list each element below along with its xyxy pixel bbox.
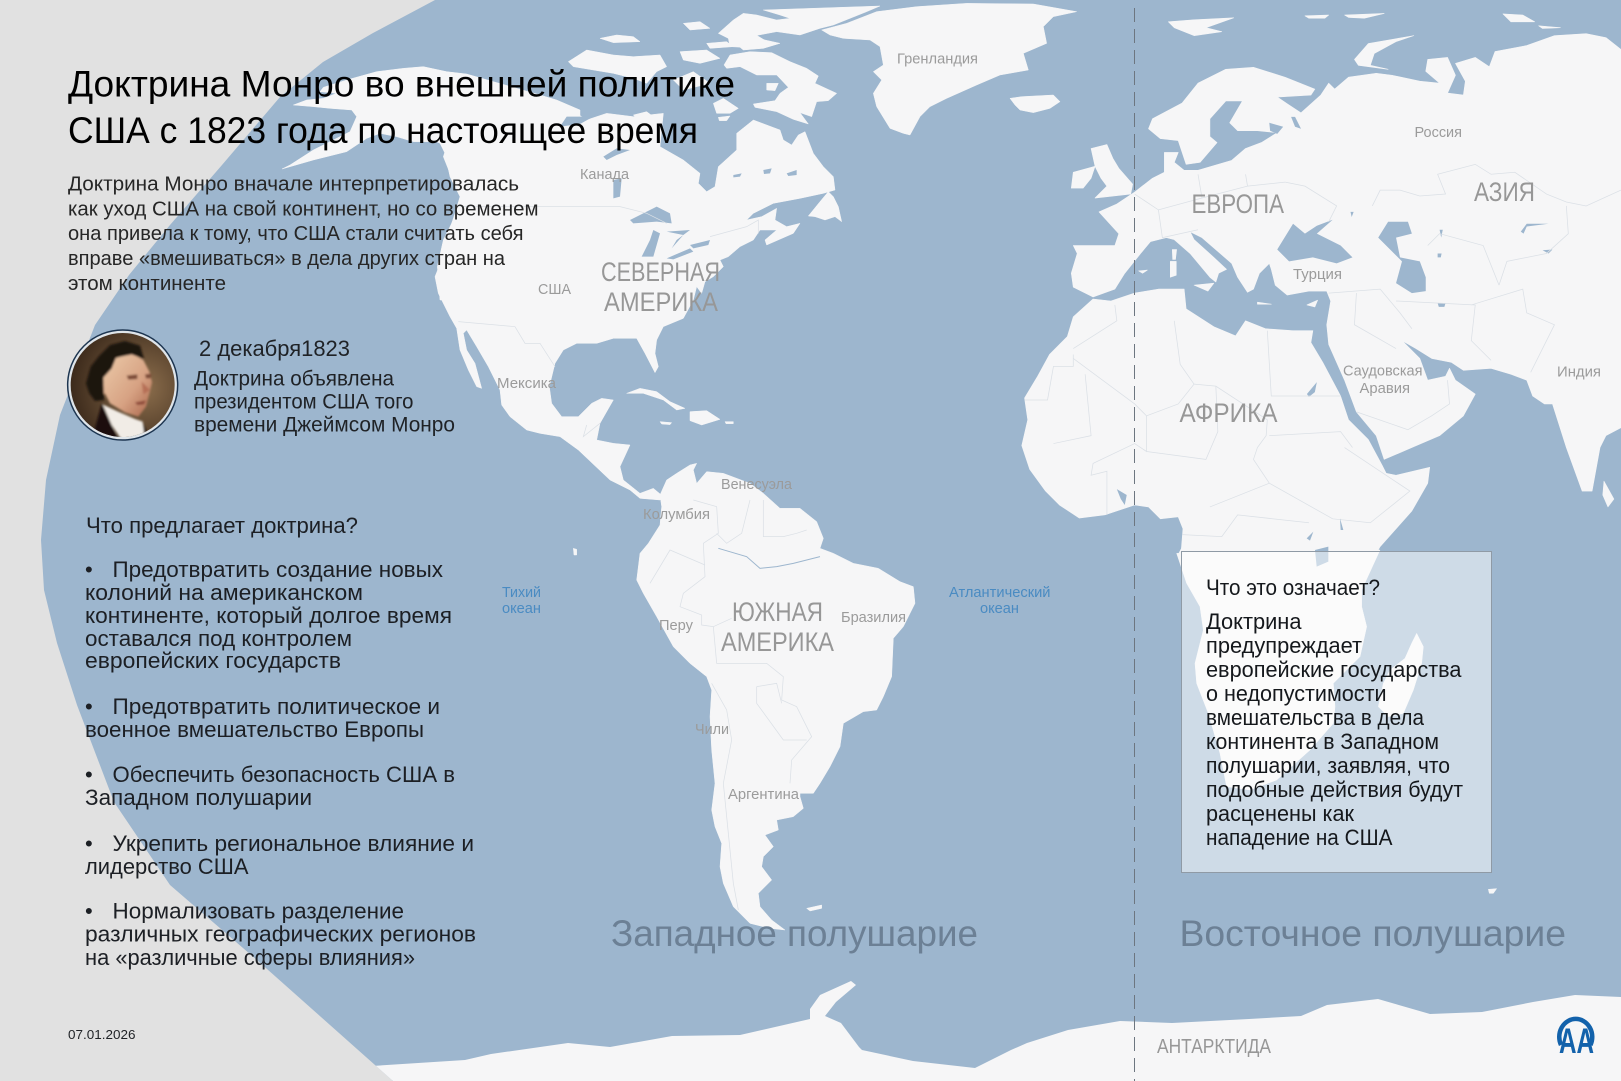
continent labels: АЗИЯ bbox=[1474, 177, 1535, 207]
country labels: Бразилия bbox=[841, 609, 906, 626]
heading: Что предлагает доктрина? bbox=[86, 513, 358, 538]
hemisphere labels bbox=[611, 913, 1566, 954]
bullet list: • bbox=[85, 694, 93, 719]
bullet list: на «различные сферы влияния» bbox=[85, 945, 415, 970]
Eurasian and African borders bbox=[1025, 164, 1621, 537]
bullet list: Нормализовать разделение bbox=[112, 898, 404, 924]
continent labels: АМЕРИКА bbox=[721, 627, 834, 657]
country labels: Канада bbox=[580, 166, 630, 183]
intro paragraph: вправе «вмешиваться» в дела других стран на bbox=[68, 247, 506, 270]
title: США с 1823 года по настоящее время bbox=[68, 110, 698, 151]
panel body text: предупреждает bbox=[1206, 633, 1362, 658]
date stamp: 07.01.2026 bbox=[68, 1027, 136, 1042]
bullet list: Укрепить региональное влияние и bbox=[112, 831, 474, 856]
bullet list: континенте, который долгое время bbox=[85, 603, 452, 628]
intro paragraph: как уход США на свой континент, но со временем bbox=[68, 198, 538, 220]
Caspian Sea bbox=[1378, 222, 1426, 293]
hemisphere divider line bbox=[1134, 8, 1136, 1081]
Greenland bbox=[822, 3, 1077, 135]
Arctic islands and Greenland bbox=[713, 3, 1077, 222]
panel heading: Что это означает? bbox=[1206, 575, 1380, 600]
bullet list: европейских государств bbox=[85, 648, 341, 673]
ocean labels: Атлантический bbox=[949, 585, 1050, 601]
South American borders bbox=[650, 500, 812, 910]
African lakes bbox=[1307, 518, 1343, 567]
intro paragraph: она привела к тому, что США стали считать себя bbox=[68, 222, 524, 245]
continent labels: АФРИКА bbox=[1180, 398, 1278, 428]
bullet list: военное вмешательство Европы bbox=[85, 717, 424, 742]
panel body text: нападение на США bbox=[1206, 825, 1392, 850]
panel body text: вмешательства в дела bbox=[1206, 705, 1424, 730]
Africa north bbox=[1022, 289, 1430, 570]
country labels: Колумбия bbox=[643, 506, 710, 523]
bullet list: • bbox=[85, 762, 93, 787]
panel body text: подобные действия будут bbox=[1206, 777, 1463, 802]
Arctic and Mediterranean islands bbox=[1139, 13, 1614, 507]
bullet list: различных географических регионов bbox=[85, 922, 476, 946]
date and announcement: 2 декабря1823 bbox=[199, 336, 350, 361]
country labels: Перу bbox=[659, 617, 693, 634]
continent labels: АМЕРИКА bbox=[604, 287, 718, 317]
Caribbean islands bbox=[627, 388, 733, 425]
icon: Anadolu Agency logo bbox=[1559, 1019, 1594, 1061]
Black Sea bbox=[1277, 220, 1352, 263]
bullet list: Обеспечить безопасность США в bbox=[112, 762, 455, 787]
panel body text: полушарии, заявляя, что bbox=[1206, 753, 1450, 778]
panel body text: о недопустимости bbox=[1206, 681, 1386, 706]
country labels: Индия bbox=[1557, 364, 1601, 380]
country labels: Турция bbox=[1293, 266, 1342, 283]
panel: what the doctrine proposes bbox=[85, 513, 476, 970]
Iceland bbox=[1010, 95, 1060, 113]
bullet list: Западном полушарии bbox=[85, 785, 312, 810]
ocean labels: океан bbox=[502, 601, 541, 617]
date and announcement: времени Джеймсом Монро bbox=[194, 412, 455, 436]
title: Доктрина Монро во внешней политике bbox=[68, 64, 735, 104]
date and announcement: Доктрина объявлена bbox=[194, 366, 394, 390]
country labels: Россия bbox=[1414, 124, 1462, 141]
hemisphere labels: Восточное полушарие bbox=[1180, 913, 1566, 954]
Amazon river bbox=[718, 548, 820, 568]
panel body text bbox=[1206, 609, 1463, 850]
country labels: Чили bbox=[695, 721, 729, 738]
bullet list: Предотвратить создание новых bbox=[112, 557, 443, 582]
bullet list: колоний на американском bbox=[85, 580, 363, 605]
bullet list: Предотвратить политическое и bbox=[112, 694, 440, 719]
country labels: Аргентина bbox=[728, 786, 800, 803]
bullet list: • bbox=[85, 898, 93, 924]
continent labels bbox=[601, 177, 1535, 1058]
Africa south bbox=[1177, 518, 1497, 893]
icon: Anadolu Agency logo: AA bbox=[1559, 1022, 1594, 1061]
title bbox=[68, 64, 735, 151]
Alaska and north-west Canada bbox=[282, 67, 580, 300]
panel body text: европейские государства bbox=[1206, 657, 1462, 682]
North America mainland bbox=[435, 97, 835, 500]
Antarctica bbox=[372, 981, 1621, 1081]
ocean labels bbox=[502, 585, 1050, 617]
country labels: Гренландия bbox=[897, 50, 978, 68]
bullet list: оставался под контролем bbox=[85, 626, 352, 651]
panel body text: континента в Западном bbox=[1206, 729, 1439, 754]
country labels bbox=[497, 50, 1601, 803]
Baffin Island bbox=[724, 52, 837, 124]
ocean labels: океан bbox=[980, 601, 1019, 617]
Britain and Ireland bbox=[1091, 145, 1133, 198]
US and Canada borders bbox=[457, 207, 758, 437]
ocean labels: Тихий bbox=[502, 585, 541, 601]
intro paragraph: Доктрина Монро вначале интерпретировалась bbox=[68, 172, 519, 196]
continent labels: СЕВЕРНАЯ bbox=[601, 257, 720, 287]
map labels bbox=[497, 50, 1601, 1058]
Ellesmere and Devon bbox=[718, 6, 880, 48]
western Canadian Arctic islands bbox=[568, 20, 770, 118]
country labels: Венесуэла bbox=[721, 476, 793, 493]
Madagascar bbox=[1378, 633, 1423, 717]
Newfoundland bbox=[808, 192, 842, 222]
date and announcement: президентом США того bbox=[194, 390, 414, 414]
intro paragraph bbox=[68, 172, 538, 295]
country labels: США bbox=[538, 281, 571, 298]
panel: what this means bbox=[1182, 552, 1492, 872]
date and announcement bbox=[194, 336, 455, 436]
inland seas bbox=[1117, 117, 1552, 505]
intro paragraph: этом континенте bbox=[68, 272, 226, 295]
country labels: Аравия bbox=[1360, 380, 1410, 397]
hemisphere labels: Западное полушарие bbox=[611, 913, 978, 954]
bullet list: лидерство США bbox=[85, 854, 249, 879]
lakes of North America bbox=[560, 117, 797, 259]
bullet list: • bbox=[85, 831, 93, 856]
continent labels: ЮЖНАЯ bbox=[732, 597, 823, 627]
Eurasia bbox=[1022, 13, 1621, 570]
bullet list bbox=[85, 557, 476, 970]
bullet list: • bbox=[85, 557, 93, 582]
continent labels: АНТАРКТИДА bbox=[1157, 1036, 1272, 1058]
portrait of James Monroe bbox=[67, 328, 180, 442]
country labels: Мексика bbox=[497, 375, 557, 392]
country labels: Саудовская bbox=[1343, 362, 1422, 380]
continent labels: ЕВРОПА bbox=[1192, 189, 1284, 219]
South America bbox=[573, 463, 915, 930]
panel body text: Доктрина bbox=[1206, 609, 1302, 634]
panel body text: расценены как bbox=[1206, 801, 1354, 826]
